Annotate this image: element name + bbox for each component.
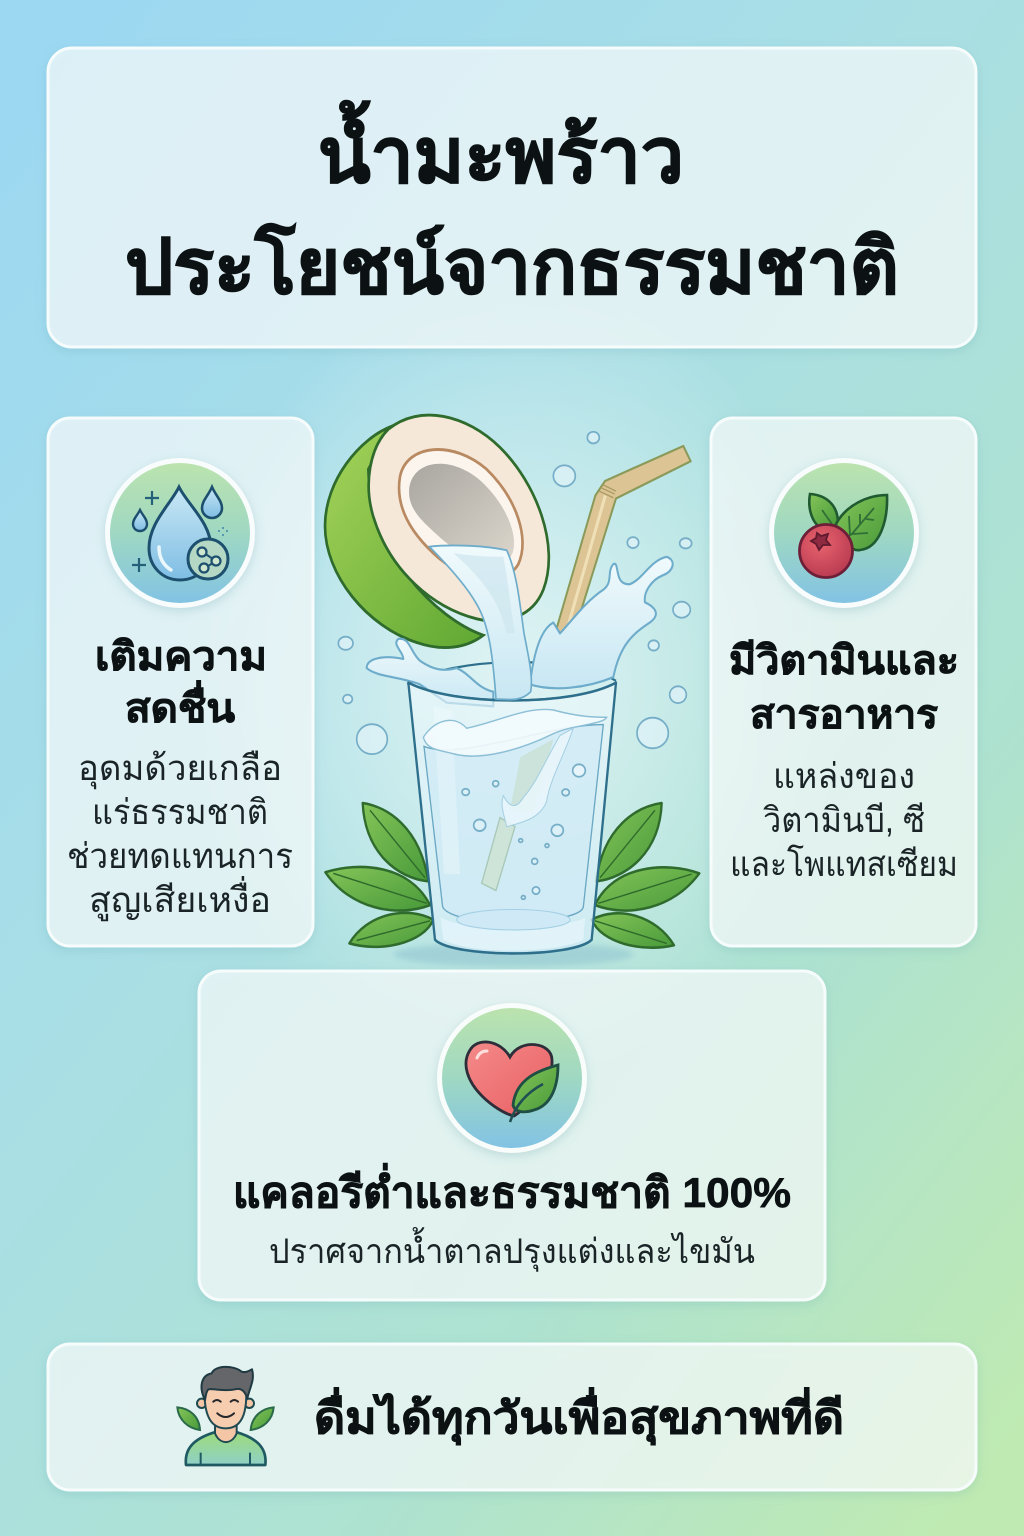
panel: low calorie — [199, 971, 825, 1300]
pouring stream — [429, 545, 531, 700]
shadow under glass — [393, 942, 633, 967]
panel: hydration — [48, 418, 313, 946]
glass back rim — [407, 662, 616, 684]
panel: title — [48, 48, 976, 347]
splash: upper right — [530, 557, 673, 688]
heading: hydration: สดชื่น — [125, 680, 235, 731]
splash: upper left — [367, 639, 493, 706]
text: footer message: ดื่มได้ทุกวันเพื่อสุขภาพที่ดี — [314, 1387, 844, 1446]
panel: footer — [48, 1344, 976, 1490]
text: vitamins description: วิตามินบี, ซี — [763, 801, 925, 840]
text: vitamins description: และโพแทสเซียม — [730, 844, 958, 884]
icon: heart and leaf — [437, 1003, 587, 1153]
text: vitamins description: แหล่งของ — [773, 757, 915, 796]
text: vitamins description — [730, 757, 958, 884]
text: low calorie description: ปราศจากน้ำตาลปรุงแต่งและไขมัน — [269, 1227, 755, 1272]
straw in water — [510, 739, 553, 812]
heading: title line 1: น้ำมะพร้าว — [318, 100, 684, 199]
text: hydration description: แร่ธรรมชาติ — [92, 793, 268, 832]
heading: low calorie: แคลอรีต่ำและธรรมชาติ 100% — [233, 1163, 791, 1216]
icon: smiling person with leaves — [177, 1367, 274, 1465]
heading: hydration: เติมความ — [95, 635, 267, 679]
text: hydration description: ช่วยทดแทนการ — [67, 837, 293, 876]
heading: vitamins — [729, 639, 959, 737]
text: hydration description: อุดมด้วยเกลือ — [78, 749, 282, 789]
straw (upper) — [544, 446, 691, 672]
swirl — [423, 709, 607, 756]
text: hydration description — [67, 749, 293, 921]
coconut — [325, 415, 549, 648]
glass body — [408, 683, 616, 953]
icon: water drops — [105, 458, 255, 608]
heading: hydration — [95, 635, 267, 731]
icon: berry and leaves — [769, 458, 919, 608]
bubbles — [338, 432, 692, 899]
icon: leaves — [325, 803, 699, 948]
heading: title line 2: ประโยชน์จากธรรมชาติ — [125, 222, 899, 310]
heading: vitamins: มีวิตามินและ — [729, 639, 959, 683]
glass rim front — [408, 683, 616, 700]
panel: vitamins — [711, 418, 976, 946]
illustration: coconut water pouring into glass — [325, 415, 699, 967]
text: hydration description: สูญเสียเหงื่อ — [89, 876, 271, 921]
heading: vitamins: สารอาหาร — [750, 693, 939, 737]
